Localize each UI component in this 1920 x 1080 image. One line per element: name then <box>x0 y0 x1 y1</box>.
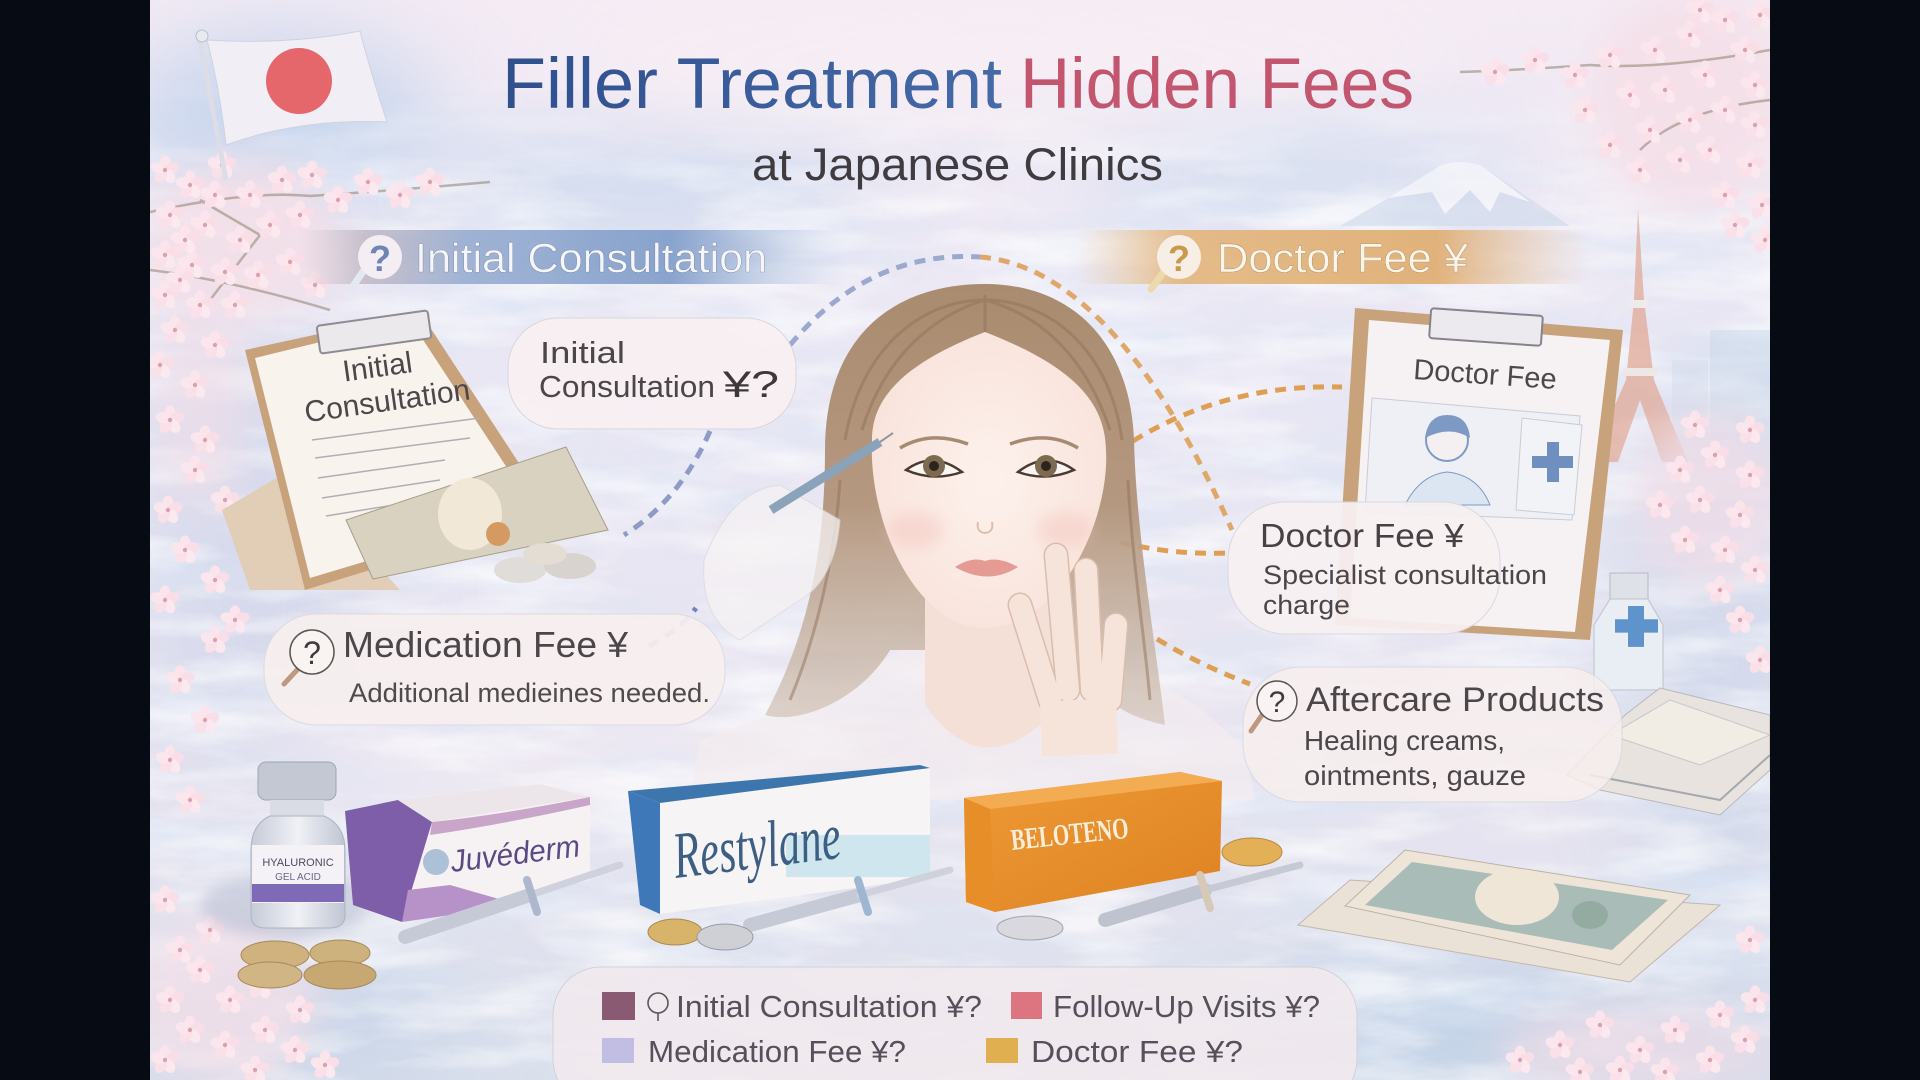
syringes <box>405 865 1300 937</box>
clipboard title: Initial <box>340 346 414 389</box>
syringe <box>771 442 880 510</box>
shoulders and blouse <box>690 650 1255 800</box>
brand name: Restylane <box>668 800 845 893</box>
callout: Medication Fee: ? <box>303 635 321 671</box>
logo mark <box>423 849 449 875</box>
callout: Medication Fee: Medication Fee ¥ <box>343 624 629 665</box>
heading banner: Doctor Fee: Doctor Fee ¥ <box>1217 235 1468 281</box>
legend panel <box>553 967 1357 1080</box>
callout: Initial Consultation: Initial <box>540 335 625 370</box>
callout: Aftercare Products: Aftercare Products <box>1306 681 1604 719</box>
product box: Juvederm <box>345 784 590 922</box>
title: Filler Treatment <box>502 45 1002 124</box>
cherry blossoms: lower right <box>1500 926 1780 1080</box>
product vial: HYALURONIC <box>262 857 334 869</box>
hair strands <box>790 295 1150 700</box>
legend: Initial Consultation: Initial Consultation ¥? <box>676 989 982 1024</box>
gloved hand <box>704 485 840 640</box>
clipboard title <box>298 339 472 429</box>
clipboard title: Doctor Fee <box>1412 354 1558 396</box>
callout: Doctor Fee: charge <box>1263 590 1350 620</box>
callout: Doctor Fee: Doctor Fee ¥ <box>1260 517 1465 554</box>
hand on cheek <box>1020 555 1116 755</box>
Tokyo Tower and skyline <box>1609 209 1770 462</box>
banknote stack <box>1298 850 1720 982</box>
heading banner: Doctor Fee <box>1078 230 1590 289</box>
neck <box>925 590 1060 748</box>
coins <box>238 838 1282 989</box>
product box: Restylane <box>628 765 930 914</box>
legend: Medication Fee: Medication Fee ¥? <box>648 1034 906 1069</box>
callout: Doctor Fee <box>1228 502 1547 634</box>
cherry blossoms: upper right branch <box>1460 0 1790 255</box>
callout: Medication Fee <box>264 614 725 725</box>
face <box>872 332 1106 628</box>
clipboard: Doctor Fee <box>1335 308 1623 640</box>
heading banner: Initial Consultation <box>315 230 827 284</box>
legend: Follow-Up Visits: Follow-Up Visits ¥? <box>1053 989 1320 1024</box>
cheeks <box>887 512 943 548</box>
callout: Aftercare Products <box>1243 667 1622 802</box>
clipboard title: Consultation <box>302 373 472 429</box>
subtitle: at Japanese Clinics <box>752 139 1163 190</box>
cherry blossoms: right side <box>1638 406 1770 673</box>
medicine bottle with cross <box>1594 573 1663 690</box>
product vial: GEL ACID <box>275 872 321 883</box>
callout: Doctor Fee: Specialist consultation <box>1263 560 1547 590</box>
cherry blossoms: lower left <box>125 626 341 1080</box>
title: Hidden Fees <box>1020 45 1414 124</box>
heading banner: Doctor Fee: ? <box>1168 238 1190 279</box>
woman with syringe <box>690 284 1255 800</box>
callout: Aftercare Products: ? <box>1269 686 1285 719</box>
dashed connector lines <box>624 257 1342 684</box>
heading banner: Initial Consultation: ? <box>369 238 391 279</box>
Mount Fuji <box>1340 162 1570 226</box>
callout: Initial Consultation: Consultation <box>539 369 715 404</box>
product vial <box>200 762 370 937</box>
product box: Beloteno <box>964 772 1222 912</box>
banknote and coins <box>346 447 608 583</box>
icon: Japanese flag <box>196 30 387 180</box>
lips <box>955 559 1018 576</box>
heading banner: Initial Consultation: Initial Consultation <box>415 235 767 281</box>
callout: Aftercare Products: ointments, gauze <box>1304 760 1526 791</box>
callout: Initial Consultation: ¥? <box>722 364 779 405</box>
legend: Doctor Fee: Doctor Fee ¥? <box>1031 1034 1243 1069</box>
callout: Aftercare Products: Healing creams, <box>1304 725 1505 756</box>
hair back <box>765 284 1165 725</box>
clipboard: Initial Consultation <box>222 310 530 590</box>
cherry blossoms: upper left branch <box>140 150 490 635</box>
brand name: BELOTENO <box>1009 812 1130 857</box>
callout: Medication Fee: Additional medieines needed. <box>349 678 710 708</box>
nose <box>978 522 992 533</box>
gauze stack <box>1567 688 1770 815</box>
ID card with doctor <box>1365 398 1582 520</box>
title <box>508 56 1412 108</box>
brand name: Juvéderm <box>448 828 582 879</box>
callout: Initial Consultation <box>508 318 796 429</box>
right eye <box>1010 438 1078 477</box>
left eye <box>900 438 968 477</box>
